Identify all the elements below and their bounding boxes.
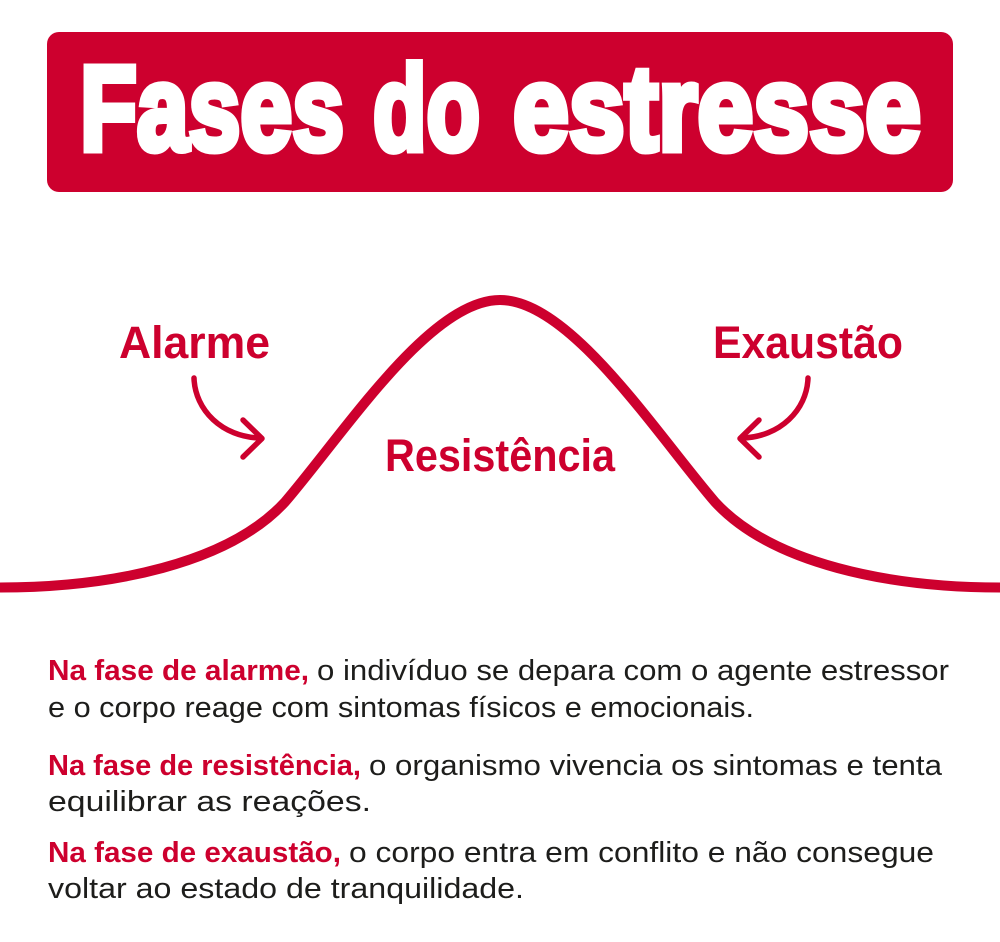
text block: resistência: o organismo vivencia os sintomas e tenta bbox=[369, 750, 943, 782]
stress curve bbox=[0, 300, 1000, 588]
label: Exaustão: Exaustão bbox=[713, 317, 903, 368]
text block: resistência: Na fase de resistência, bbox=[48, 750, 361, 782]
text block: alarme bbox=[48, 655, 949, 724]
text block: resistência: equilibrar as reações. bbox=[48, 786, 371, 818]
text block: alarme: o indivíduo se depara com o agente estressor bbox=[317, 655, 949, 687]
text block: exaustão: o corpo entra em conflito e não consegue bbox=[349, 837, 934, 869]
text block: resistência bbox=[48, 750, 943, 818]
arrow: alarme bbox=[194, 378, 262, 457]
text block: alarme: Na fase de alarme, bbox=[48, 655, 309, 687]
title: estresse bbox=[513, 40, 921, 176]
label: Resistência: Resistência bbox=[385, 430, 616, 481]
title bbox=[80, 40, 921, 176]
title banner bbox=[47, 32, 953, 192]
text block: exaustão: Na fase de exaustão, bbox=[48, 837, 341, 869]
text block: exaustão bbox=[48, 837, 934, 905]
text block: exaustão: voltar ao estado de tranquilidade. bbox=[48, 873, 524, 905]
text block: alarme: e o corpo reage com sintomas físicos e emocionais. bbox=[48, 692, 754, 724]
title: do bbox=[373, 40, 480, 176]
label: Alarme: Alarme bbox=[119, 317, 270, 368]
title: Fases bbox=[80, 40, 344, 176]
arrow: exaustão bbox=[740, 378, 808, 457]
